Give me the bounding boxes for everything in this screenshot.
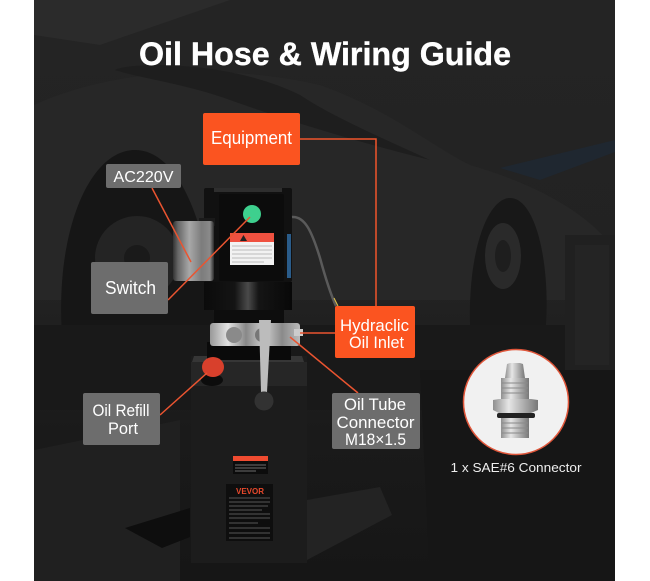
tank warning and VEVOR labels: VEVOR bbox=[236, 487, 264, 496]
callout: Oil Refill Port: Oil Refill bbox=[92, 401, 150, 420]
callout: Equipment bbox=[203, 113, 300, 165]
oil refill cap bbox=[201, 357, 224, 386]
motor switch housing bbox=[173, 218, 215, 281]
title: Oil Hose & Wiring Guide bbox=[139, 36, 511, 72]
green power button bbox=[243, 205, 261, 223]
connector inset bbox=[450, 350, 582, 475]
motor warning label bbox=[230, 233, 274, 265]
callout: AC220V: AC220V bbox=[114, 169, 174, 186]
release handle bbox=[254, 320, 274, 410]
reservoir tank bbox=[191, 342, 307, 563]
icon: SAE#6 connector fitting bbox=[493, 363, 538, 438]
callout: Oil Tube Connector: Oil Tube bbox=[344, 395, 406, 414]
callout: Oil Tube Connector bbox=[332, 393, 420, 449]
callout: Hydraulic Oil Inlet: Oil Inlet bbox=[349, 333, 404, 352]
callout: Equipment: Equipment bbox=[211, 128, 292, 148]
callout: Hydraulic Oil Inlet bbox=[335, 306, 415, 358]
valve block bbox=[210, 323, 303, 346]
callout: Oil Refill Port: Port bbox=[108, 419, 138, 438]
leader lines bbox=[152, 139, 376, 415]
callout: AC220V bbox=[106, 164, 181, 188]
callout: Hydraulic Oil Inlet: Hydraclic bbox=[340, 316, 409, 335]
callout: Switch: Switch bbox=[105, 278, 156, 298]
callout: Oil Tube Connector: Connector bbox=[336, 413, 415, 432]
inset circle bbox=[464, 350, 568, 454]
callout: Switch bbox=[91, 262, 168, 314]
inset caption: 1 x SAE#6 Connector bbox=[450, 460, 582, 475]
power cable bbox=[292, 217, 338, 306]
motor body bbox=[204, 188, 292, 324]
callout: Oil Refill Port bbox=[83, 393, 160, 445]
product: hydraulic power unit bbox=[173, 188, 338, 563]
callout: Oil Tube Connector: M18×1.5 bbox=[345, 430, 406, 449]
tank warning and VEVOR labels bbox=[226, 456, 273, 541]
